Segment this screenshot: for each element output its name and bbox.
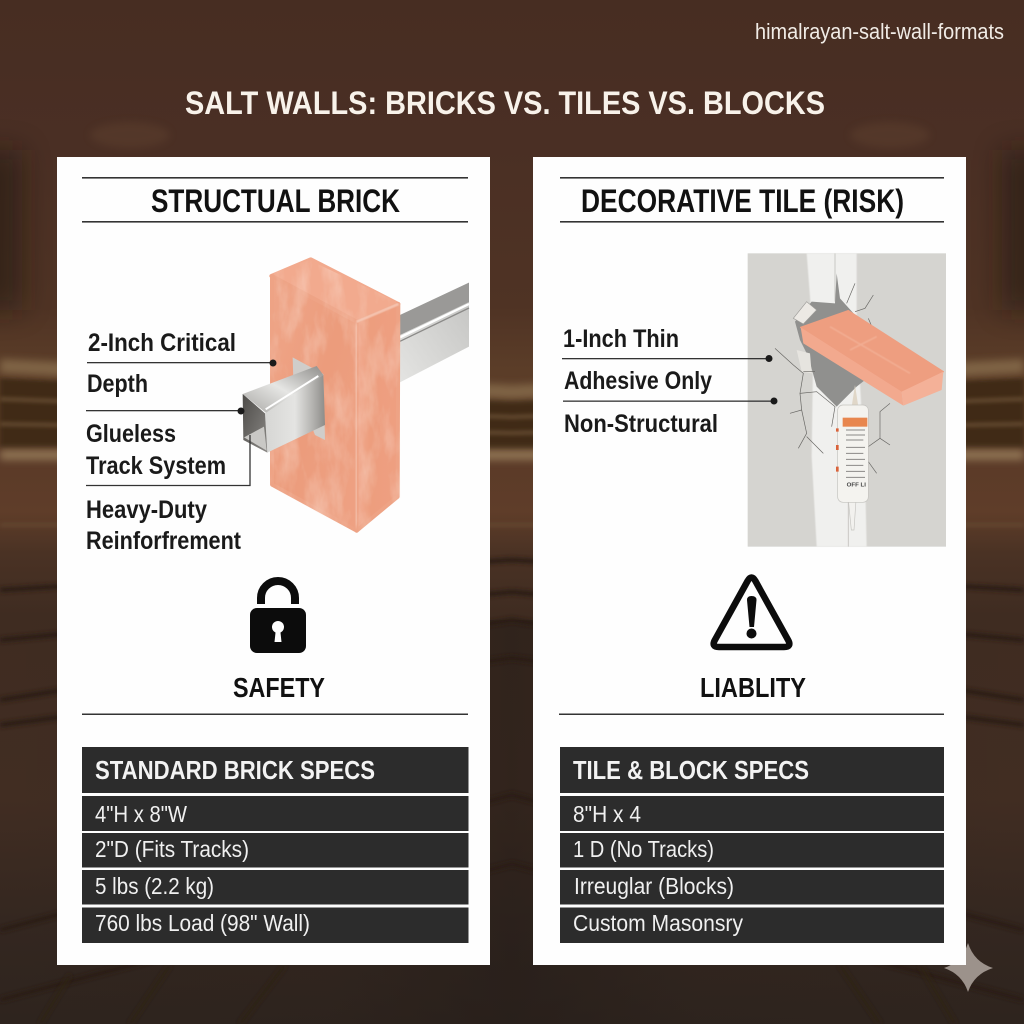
table: standard brick specs: 5 lbs (2.2 kg) [95, 873, 214, 899]
callout: heavy-duty reinforcement: Heavy-Duty [86, 496, 207, 524]
table: tile and block specs: 8"H x 4 [573, 801, 641, 827]
illustration: tile glued to cracked wall: OFF LI [847, 482, 866, 488]
label: liability: LIABLITY [700, 672, 806, 703]
heading: decorative tile: DECORATIVE TILE (RISK) [581, 183, 904, 219]
heading: structural brick: STRUCTUAL BRICK [151, 183, 400, 219]
callout: 2-inch critical depth: Depth [87, 370, 148, 398]
callout: 2-inch critical depth [87, 329, 276, 398]
callout: heavy-duty reinforcement: Reinforfrement [86, 527, 242, 555]
table: tile and block specs: Irreuglar (Blocks) [574, 873, 734, 899]
title: SALT WALLS: BRICKS VS. TILES VS. BLOCKS [185, 85, 825, 121]
panel: structural brick [57, 157, 490, 965]
table: standard brick specs [82, 747, 468, 943]
table: tile and block specs: 1 D (No Tracks) [573, 836, 714, 862]
illustration: salt brick on steel track [243, 259, 469, 533]
icon: sparkle watermark [944, 943, 993, 992]
label: safety: SAFETY [233, 672, 325, 703]
callout: glueless track system: Glueless [86, 420, 176, 448]
icon: warning triangle [714, 578, 789, 647]
table: tile and block specs [560, 747, 944, 943]
table: tile and block specs: TILE & BLOCK SPECS [573, 755, 809, 785]
site tag: himalrayan-salt-wall-formats [755, 19, 1004, 44]
table: standard brick specs: 2"D (Fits Tracks) [95, 836, 249, 862]
icon: padlock [250, 581, 306, 653]
callout: adhesive only: Adhesive Only [564, 367, 712, 395]
callout: adhesive only [563, 367, 778, 404]
illustration: tile glued to cracked wall [748, 253, 946, 547]
callout: glueless track system [86, 408, 244, 480]
callout: non-structural: Non-Structural [564, 410, 718, 438]
callout: 1-inch thin [562, 325, 772, 362]
table: tile and block specs: Custom Masonsry [573, 910, 743, 936]
table: standard brick specs: 760 lbs Load (98" Wall) [95, 910, 310, 936]
callout: heavy-duty reinforcement [86, 435, 250, 555]
callout: glueless track system: Track System [86, 452, 226, 480]
table: standard brick specs: 4"H x 8"W [95, 801, 187, 827]
panel: decorative tile [533, 157, 966, 965]
table: standard brick specs: STANDARD BRICK SPECS [95, 755, 375, 785]
callout: 2-inch critical depth: 2-Inch Critical [88, 329, 236, 357]
callout: 1-inch thin: 1-Inch Thin [563, 325, 679, 353]
